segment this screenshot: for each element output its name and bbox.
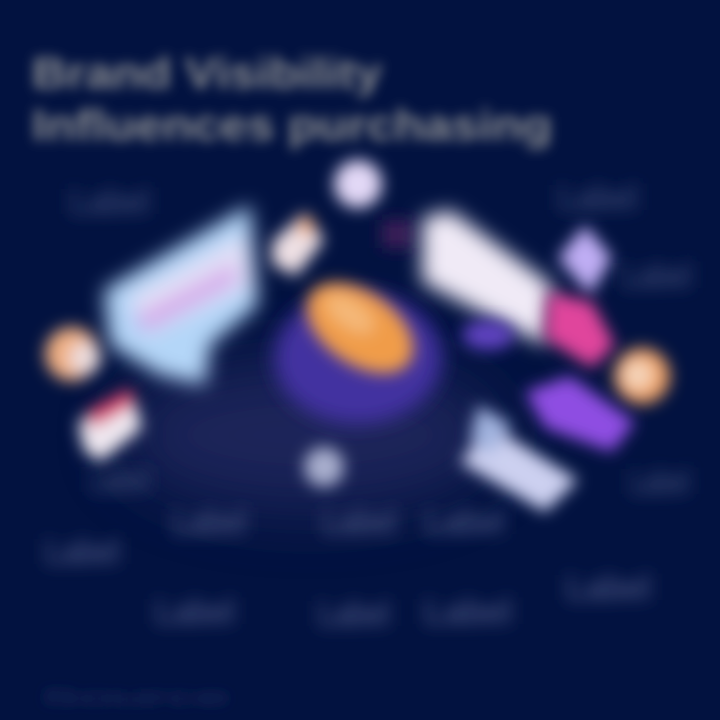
labels [45, 177, 692, 634]
title: Brand Visibility [32, 49, 383, 98]
footer: Source [40, 687, 230, 709]
label: middle 2: Label [322, 501, 397, 542]
label: top right: Label [558, 177, 638, 218]
label: middle 3: Label [425, 501, 505, 542]
title: Influences purchasing [32, 101, 552, 150]
lower right card [460, 405, 578, 512]
label: middle 1: Label [172, 501, 247, 542]
icon: top circle [334, 160, 382, 208]
platform glow [120, 360, 500, 510]
right purple card [525, 376, 635, 452]
icon: left orange circle [45, 327, 101, 381]
label: right low: Label [566, 567, 651, 608]
left screen panel [104, 205, 258, 385]
label: bottom 1: Label [155, 591, 235, 632]
icon: right orange circle [614, 348, 670, 404]
centre ring [274, 292, 442, 424]
icon: left card [78, 388, 142, 462]
icon: small centre tile [304, 447, 344, 487]
label: bottom 3: Label [424, 591, 512, 632]
right pink block [545, 292, 615, 368]
label: lower left 2: Label [45, 531, 120, 572]
label: right: Label [622, 255, 692, 296]
icon: small dark red tile [382, 220, 412, 248]
purple block under right screen [462, 320, 514, 350]
right screen panel [422, 210, 552, 345]
label: top left: Label [70, 181, 150, 222]
label: bottom 2: Label [318, 593, 390, 634]
centre orange shape [290, 264, 430, 392]
label: lower left 1: Label [90, 459, 150, 500]
icon: right lilac diamond [558, 225, 612, 295]
title [32, 49, 552, 150]
icon: upper centre tile [272, 212, 324, 276]
